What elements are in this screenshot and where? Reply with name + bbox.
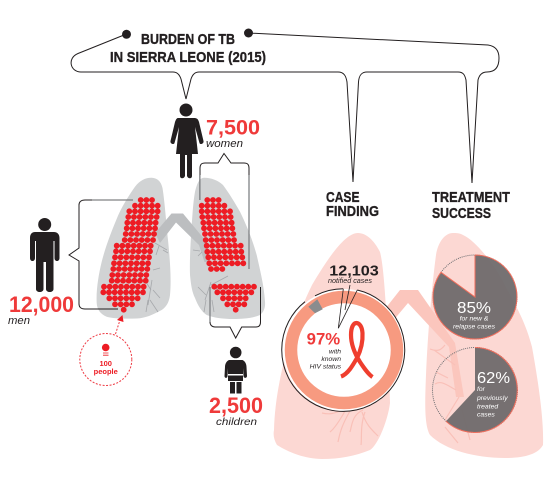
- heading: treatment success: TREATMENT: [432, 189, 510, 206]
- label: men count: 12,000: [9, 292, 74, 317]
- callout: title speech bubble: [71, 28, 499, 183]
- chart: HIV status donut: known: [321, 356, 341, 363]
- icon: red ribbon: [341, 323, 372, 377]
- connector outline: [71, 33, 499, 183]
- heading: case finding: FINDING: [326, 203, 379, 220]
- icon: woman: [170, 104, 204, 178]
- outer ring: [282, 289, 405, 411]
- children bracket: [210, 287, 260, 338]
- panel: burden lungs: [97, 178, 265, 319]
- icon: child: [224, 347, 247, 394]
- title: BURDEN OF TB: [141, 31, 235, 48]
- chart: pie 62%: previously: [476, 395, 508, 402]
- heading: case finding: [326, 189, 379, 220]
- legend dot: [102, 344, 109, 351]
- label: children count: 2,500: [209, 393, 263, 418]
- chart: HIV status donut: notified cases: [328, 276, 372, 285]
- label: men count: men: [8, 315, 30, 327]
- chart: pie 85%: [433, 255, 517, 339]
- pink right lung: [425, 233, 543, 458]
- chart: pie 85%: relapse cases: [453, 324, 496, 331]
- bullet left: [122, 30, 131, 39]
- heading: case finding: CASE: [326, 189, 360, 206]
- label: women count: women: [206, 138, 243, 150]
- bullet right: [244, 28, 253, 38]
- salmon ring: [291, 297, 397, 403]
- icon: man: [30, 218, 60, 292]
- pink trachea and bronchi: [385, 290, 464, 397]
- title: [110, 31, 266, 66]
- bracket sections over lungs: [92, 175, 249, 322]
- dashed arrow: [116, 315, 124, 334]
- notified pointer: [338, 285, 357, 328]
- chart: pie 62%: cases: [477, 412, 495, 418]
- label: men count: [8, 292, 74, 327]
- dots: women 75: [202, 200, 243, 269]
- men bracket: [69, 200, 133, 309]
- dots: men 120: [103, 200, 158, 310]
- notified cases: 12,103: [329, 262, 379, 280]
- left grey lung: [97, 178, 171, 319]
- chart: pie 62%: [432, 348, 518, 432]
- chart: pie 62%: for: [477, 386, 486, 393]
- legend: 100 people: [80, 315, 132, 386]
- grey 3% segment: [308, 299, 323, 313]
- white disc: [283, 289, 405, 411]
- panel: case finding and treatment lungs: [274, 233, 543, 459]
- chart: pie 62%: 62%: [477, 370, 510, 387]
- heading: treatment success: SUCCESS: [432, 205, 491, 222]
- chart: pie 62%: treated: [477, 403, 498, 410]
- percent: 97%: [307, 330, 341, 348]
- pink left lung: [274, 233, 390, 459]
- heading: treatment success: [432, 189, 510, 222]
- dashed circle: [80, 334, 132, 386]
- legend: 100 people: people: [94, 367, 118, 376]
- chart: HIV status donut: with: [329, 348, 341, 355]
- legend: 100 people: 100: [99, 359, 112, 368]
- label: women count: [206, 116, 260, 150]
- grey trachea and bronchi: [155, 214, 210, 262]
- title: IN SIERRA LEONE (2015): [110, 49, 266, 66]
- grey bronchioles: [146, 243, 228, 312]
- chart: HIV status donut: HIV status: [310, 364, 342, 370]
- equals sign: [103, 353, 108, 355]
- label: children count: children: [216, 416, 257, 428]
- chart: pie 85%: 85%: [457, 300, 491, 317]
- dots: children 25: [214, 287, 254, 310]
- right grey lung: [190, 178, 265, 319]
- chart: pie 85%: for new &: [460, 316, 489, 322]
- chart: HIV status donut: [282, 262, 405, 411]
- women bracket: [200, 154, 249, 269]
- label: women count: 7,500: [206, 116, 260, 140]
- pink bronchioles: [322, 345, 470, 445]
